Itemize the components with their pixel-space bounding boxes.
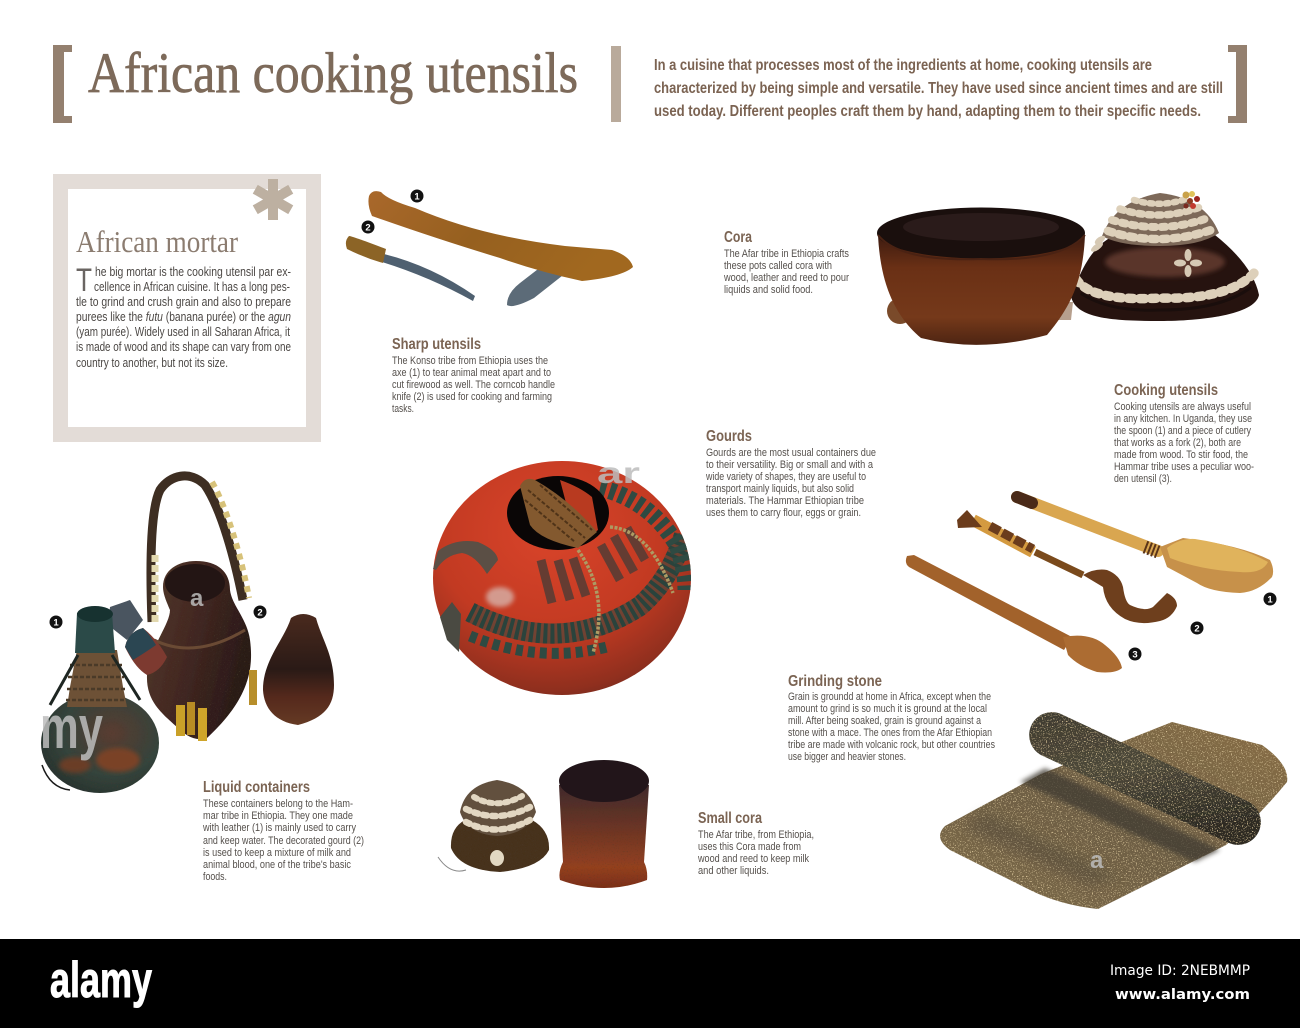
- text: cooking utensils: the spoon (1) and a piece of cutlery: [1114, 425, 1251, 437]
- intro text: [654, 57, 1223, 120]
- hole and stopper: [507, 476, 609, 550]
- text: cooking utensils: that works as a fork (2), both are: [1114, 437, 1241, 449]
- header divider bar: [611, 46, 621, 122]
- text: sharp utensils: knife (2) is used for cooking and farming: [392, 391, 552, 403]
- text: liquid containers: These containers belong to the Ham-: [203, 798, 353, 810]
- icon: asterisk: [253, 179, 293, 220]
- patch lower left: [440, 602, 461, 652]
- badge 1: 1: [414, 192, 420, 202]
- text: grinding stone: stone with a mace. The ones from the Afar Ethiopian: [788, 727, 992, 739]
- text: cooking utensils: [1114, 382, 1254, 485]
- badge 2: [1190, 622, 1204, 634]
- mortar body text: cellence in African cuisine. It has a long pes-: [94, 280, 290, 294]
- upper right zigzag: [600, 488, 686, 590]
- text: small cora: [697, 810, 814, 877]
- text: sharp utensils: [392, 336, 555, 415]
- mortar body text: T: [76, 262, 92, 298]
- title: African cooking utensils: [88, 42, 578, 105]
- header left bracket: [53, 45, 72, 123]
- cone stopper: [263, 614, 334, 725]
- badge 2: 2: [365, 222, 371, 234]
- mortar body text: he big mortar is the cooking utensil par ex-: [95, 265, 291, 279]
- text: grinding stone: Grain is groundd at home in Africa, except when the: [788, 691, 991, 703]
- stitching: [578, 527, 673, 653]
- text: grinding stone: amount to grind is so much it is ground at the local: [788, 703, 987, 715]
- badge 2: [254, 606, 266, 618]
- triangle band: [470, 636, 607, 653]
- text: cora: [723, 229, 849, 296]
- badge 2: [362, 220, 374, 234]
- text: small cora: and other liquids.: [698, 865, 769, 877]
- text: grinding stone: [788, 673, 995, 763]
- badge 1: [410, 190, 424, 202]
- text: gourds: wide variety of shapes, they are useful to: [705, 471, 866, 483]
- text: gourds: [705, 428, 876, 519]
- badge 1: [50, 616, 62, 628]
- mortar body text: [76, 262, 291, 370]
- text: liquid containers: [202, 779, 364, 883]
- handle left: [433, 541, 498, 574]
- radial stripes: [541, 528, 645, 603]
- highlight: [486, 587, 514, 607]
- sharp utensils illustration: [346, 190, 633, 306]
- gourd with handle: [147, 476, 257, 741]
- text: grinding stone: Grinding stone: [788, 673, 882, 690]
- text: cooking utensils: Cooking utensils are always useful: [1114, 401, 1251, 413]
- text: liquid containers: mar tribe in Ethiopia. They one made: [203, 810, 353, 822]
- text: gourds: uses them to carry flour, eggs or grain.: [706, 507, 861, 519]
- text: gourds: to their versatility. Big or small and with a: [706, 459, 874, 471]
- text: cooking utensils: in any kitchen. In Uganda, they use: [1114, 413, 1252, 425]
- spoons illustration: [906, 497, 1276, 672]
- text: grinding stone: mill. After being soaked, grain is ground against a: [788, 715, 982, 727]
- badge 3: [1128, 648, 1142, 660]
- mortar body text: (yam purée). Widely used in all Saharan Africa, it: [76, 325, 290, 339]
- lid: [1071, 191, 1259, 321]
- panel: African mortar: [53, 174, 321, 442]
- slab: [940, 722, 1287, 909]
- footer logo: alamy: [50, 952, 152, 1008]
- text: gourds: transport mainly liquids, but also solid: [706, 483, 854, 495]
- mortar heading: African mortar: [76, 224, 239, 259]
- text: gourds: Gourds: [706, 428, 752, 445]
- intro text: In a cuisine that processes most of the ingredients at home, cooking utensils are: [654, 57, 1152, 74]
- text: liquid containers: and keep water. The decorated gourd (2): [203, 835, 364, 847]
- text: sharp utensils: The Konso tribe from Ethiopia uses the: [392, 355, 548, 367]
- text: small cora: Small cora: [698, 810, 762, 827]
- text: liquid containers: foods.: [203, 871, 227, 883]
- badge 1: 1: [53, 618, 59, 628]
- text: liquid containers: is used to keep a mixture of milk and: [203, 847, 351, 859]
- text: cooking utensils: made from wood. To stir food, the: [1114, 449, 1248, 461]
- text: gourds: Gourds are the most usual containers due: [706, 447, 876, 459]
- mortar body text: country to another, but not its size.: [76, 356, 228, 370]
- text: grinding stone: use bigger and heavier stones.: [788, 751, 906, 763]
- text: cora: these pots called cora with: [724, 260, 832, 272]
- mortar body text: is made of wood and its shape can vary from one: [76, 340, 291, 354]
- text: sharp utensils: cut firewood as well. The corncob handle: [392, 379, 555, 391]
- bowl: [877, 208, 1085, 345]
- watermark fragment: ar: [597, 457, 640, 490]
- text: liquid containers: with leather (1) is mainly used to carry: [202, 822, 356, 834]
- text: cooking utensils: den utensil (3).: [1114, 473, 1172, 485]
- text: small cora: The Afar tribe, from Ethiopia,: [698, 829, 814, 841]
- image id: Image ID: 2NEBMMP: [1110, 963, 1250, 979]
- mace: [1029, 712, 1261, 845]
- text: cora: The Afar tribe in Ethiopia crafts: [724, 248, 849, 260]
- leather bottle: [40, 600, 167, 793]
- badge 2: 2: [257, 608, 263, 618]
- badge 1: [1264, 592, 1276, 606]
- text: small cora: uses this Cora made from: [698, 841, 801, 853]
- text: cora: wood, leather and reed to pour: [723, 272, 849, 284]
- leather bottle: my: [40, 694, 103, 761]
- badge 2: 2: [1194, 624, 1200, 634]
- mortar body text: purees like the futu (banana purée) or the agun: [76, 310, 291, 324]
- header right bracket: [1228, 45, 1247, 123]
- footer url: www.alamy.com: [1115, 987, 1250, 1003]
- watermark fragment: a: [1090, 847, 1104, 874]
- gourd illustration: [433, 457, 691, 695]
- spoon 2: [957, 510, 1177, 623]
- text: liquid containers: animal blood, one of the tribe's basic: [203, 859, 351, 871]
- woven lid: [438, 780, 549, 872]
- cup: [559, 760, 649, 888]
- knife: [346, 236, 475, 301]
- text: sharp utensils: axe (1) to tear animal meat apart and to: [392, 367, 551, 379]
- grinding stone illustration: [940, 712, 1287, 909]
- checker band: [470, 535, 684, 634]
- footer bar: [0, 939, 1300, 1028]
- text: gourds: materials. The Hammar Ethiopian tribe: [706, 495, 864, 507]
- text: sharp utensils: Sharp utensils: [392, 336, 481, 353]
- text: grinding stone: tribe are made with volcanic rock, but other countries: [788, 739, 995, 751]
- slab dark bands: [965, 768, 1220, 885]
- text: cora: liquids and solid food.: [724, 284, 813, 296]
- small cora illustration: [438, 760, 649, 888]
- spoon 1: [1017, 497, 1273, 593]
- text: cora: Cora: [724, 229, 752, 246]
- text: liquid containers: Liquid containers: [203, 779, 310, 796]
- text: cooking utensils: Cooking utensils: [1114, 382, 1218, 399]
- text: small cora: wood and reed to keep milk: [697, 853, 809, 865]
- gourd with handle: a: [190, 585, 204, 612]
- badge 3: 3: [1132, 650, 1138, 660]
- text: sharp utensils: tasks.: [392, 403, 414, 415]
- text: cooking utensils: Hammar tribe uses a peculiar woo-: [1114, 461, 1254, 473]
- cora illustration: [877, 191, 1259, 345]
- axe: [368, 191, 633, 306]
- spoon 3: [906, 555, 1122, 672]
- badge 1: 1: [1267, 594, 1273, 606]
- liquid containers illustration: [40, 476, 334, 793]
- mortar body text: tle to grind and crush grain and also to prepare: [76, 295, 291, 309]
